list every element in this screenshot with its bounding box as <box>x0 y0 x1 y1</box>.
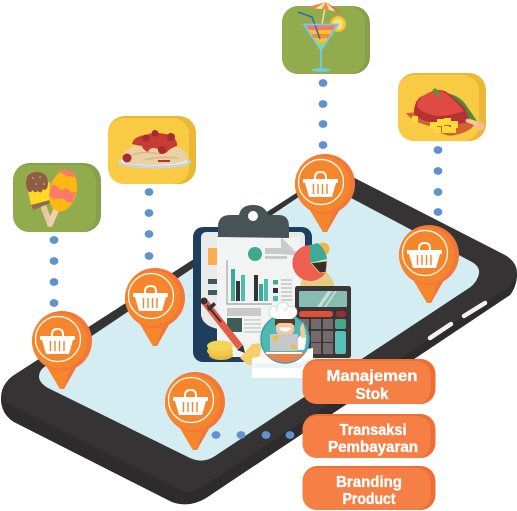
dotted connector: roast chicken <box>434 146 442 216</box>
pin: spaghetti <box>125 268 185 346</box>
dotted connector: ice cream <box>50 236 58 307</box>
button: Manajemen Stok: Stok <box>356 386 389 403</box>
cocktail umbrella <box>308 2 342 13</box>
card: cocktail <box>282 2 370 74</box>
button: Manajemen Stok <box>302 359 436 404</box>
coins <box>207 340 233 360</box>
card: roast chicken <box>398 73 486 141</box>
dotted connector: to feature buttons <box>212 431 294 439</box>
pin: roast chicken <box>399 225 459 303</box>
clipboard illustration <box>193 205 312 362</box>
clipboard clip <box>217 205 289 238</box>
button: Branding Product: Branding <box>336 474 402 491</box>
pin: ice cream <box>32 311 92 389</box>
clipboard board <box>193 227 312 362</box>
button: Branding Product <box>302 466 436 510</box>
pie chart <box>292 242 335 288</box>
desk box and yellow wedge <box>240 343 313 378</box>
chef avatar <box>261 302 309 363</box>
card: ice cream <box>13 163 101 232</box>
dotted connector: cocktail <box>319 79 327 149</box>
phone body <box>1 168 517 504</box>
pin: bottom <box>165 372 225 450</box>
button: Transaksi Pembayaran: Pembayaran <box>328 439 418 456</box>
phone screen <box>39 182 479 461</box>
paper with charts <box>208 237 300 357</box>
button: Transaksi Pembayaran: Transaksi <box>340 422 406 439</box>
card: spaghetti <box>108 116 196 184</box>
button: Branding Product: Product <box>342 491 396 508</box>
button: Manajemen Stok: Manajemen <box>326 368 418 385</box>
phone side buttons <box>430 303 485 338</box>
button: Transaksi Pembayaran <box>302 414 436 458</box>
dotted connector: pasta <box>145 188 153 260</box>
calculator <box>295 286 351 358</box>
pin: cocktail <box>295 154 355 232</box>
pen <box>200 298 245 353</box>
